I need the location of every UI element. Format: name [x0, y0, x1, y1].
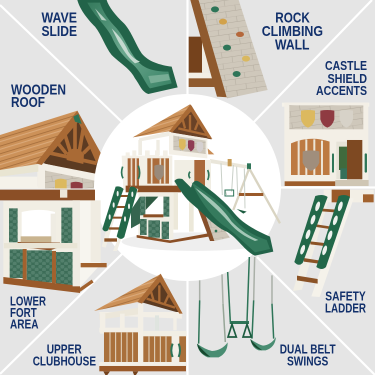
heading: dual belt swings [280, 342, 336, 368]
heading: rock climbing wall [262, 10, 323, 54]
heading: upper clubhouse: CLUBHOUSE [33, 353, 96, 368]
upper fort wall [122, 150, 181, 192]
heading: castle shield accents: SHIELD [328, 71, 367, 86]
right tower [174, 148, 214, 232]
icon: rock climbing wall [189, 0, 268, 98]
heading: wooden roof [11, 81, 66, 111]
heading: wave slide [42, 10, 77, 40]
heading: safety ladder [325, 289, 366, 315]
stone shield panel [169, 132, 207, 158]
heading: rock climbing wall: CLIMBING [262, 23, 323, 40]
heading: lower fort area: FORT [10, 305, 37, 320]
heading: dual belt swings: DUAL BELT [280, 342, 336, 357]
icon: upper clubhouse [94, 274, 187, 375]
panel: lower fort area [0, 190, 107, 331]
panel: rock climbing wall [189, 0, 323, 98]
panel: castle shield accents [282, 58, 369, 186]
heading: castle shield accents [316, 58, 367, 98]
heading: lower fort area: AREA [10, 316, 39, 331]
ladder [102, 186, 138, 251]
icon: safety ladder [293, 190, 374, 297]
heading: wave slide: WAVE [42, 10, 77, 27]
heading: dual belt swings: SWINGS [287, 353, 329, 368]
icon: wave slide [77, 0, 178, 94]
main slide [174, 179, 273, 256]
heading: upper clubhouse: UPPER [47, 342, 82, 357]
panel: wooden roof [0, 81, 101, 188]
heading: lower fort area: LOWER [10, 293, 46, 308]
swing frame [210, 159, 280, 223]
heading: wooden roof: WOODEN [11, 81, 66, 98]
panel: safety ladder [293, 190, 374, 315]
center circle [94, 94, 281, 281]
roof and gable [133, 104, 212, 155]
icon: lower fort [0, 190, 107, 293]
rock wall [195, 201, 230, 241]
heading: wave slide: SLIDE [42, 23, 77, 40]
panel: upper clubhouse [33, 274, 187, 375]
panel: dual belt swings [197, 257, 336, 368]
heading: wooden roof: ROOF [11, 94, 45, 111]
heading: rock climbing wall: ROCK [275, 10, 310, 26]
lower fort [131, 192, 210, 243]
icon: wooden roof [0, 111, 101, 188]
heading: upper clubhouse [33, 342, 96, 368]
central playset illustration [102, 104, 280, 256]
panel: wave slide [42, 0, 178, 94]
icon: dual belt swings [197, 257, 276, 357]
heading: rock climbing wall: WALL [275, 36, 310, 54]
heading: lower fort area [10, 293, 46, 331]
icon: castle wall section [282, 103, 369, 186]
